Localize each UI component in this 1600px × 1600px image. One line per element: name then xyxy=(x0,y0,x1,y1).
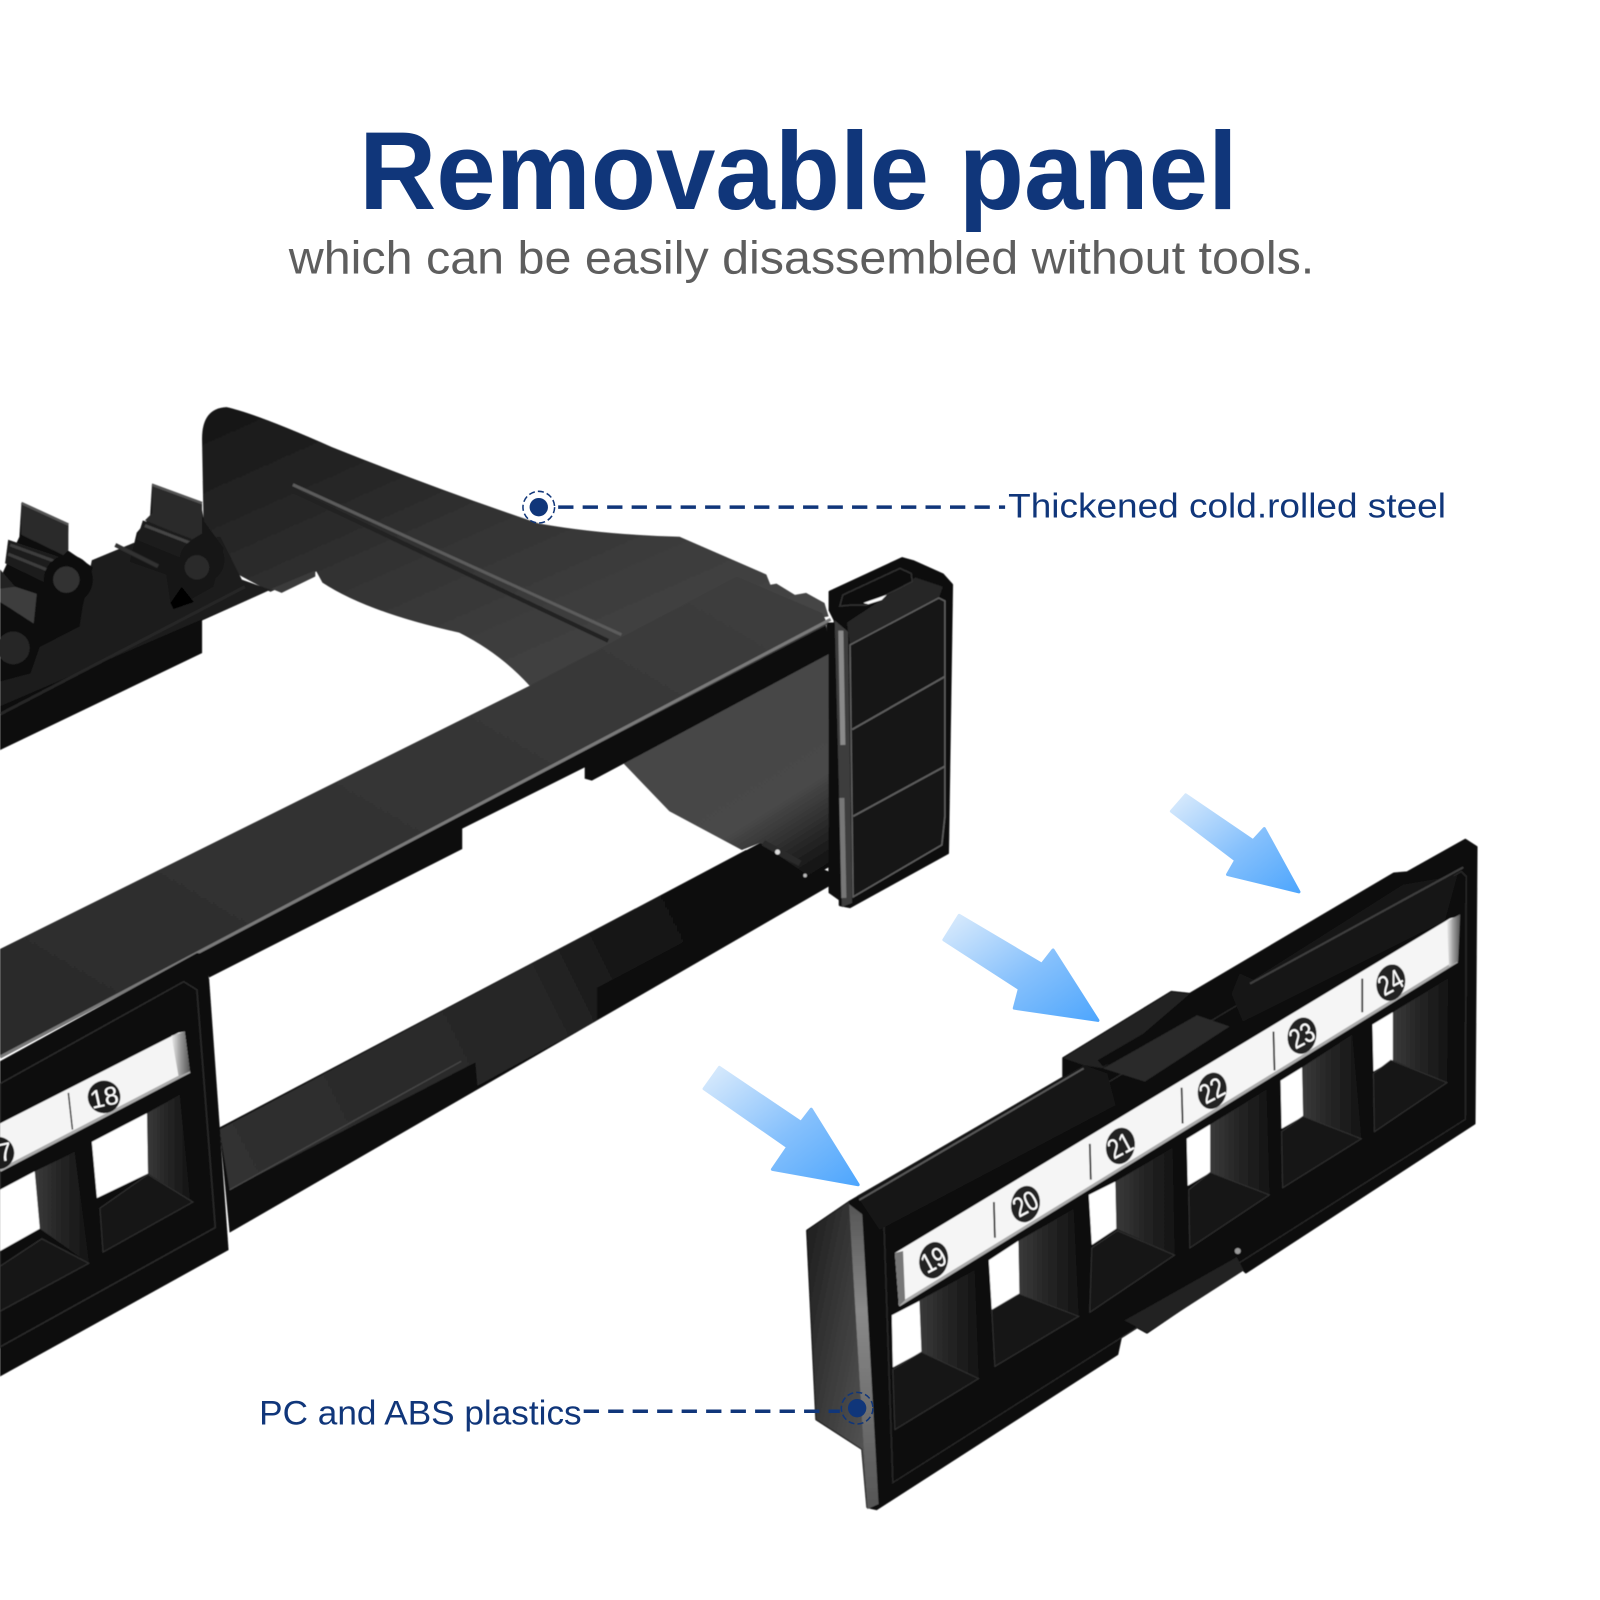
front plate ports 17 and 18 xyxy=(0,953,229,1377)
cap slot xyxy=(840,568,912,606)
patch panel frame xyxy=(0,407,952,1377)
subtitle: which can be easily disassembled without tools. xyxy=(288,231,1314,283)
number 20: 20 xyxy=(1007,1184,1043,1223)
port 21 xyxy=(1089,1148,1174,1312)
module body xyxy=(807,840,1477,1509)
port 18 xyxy=(147,1095,190,1200)
cap top face xyxy=(847,578,943,645)
arrow: bottom left xyxy=(704,1067,858,1185)
arrow: top right xyxy=(1171,795,1299,892)
arrow: middle xyxy=(944,915,1098,1020)
top rail surface xyxy=(0,577,828,1057)
third clamp xyxy=(0,569,40,682)
cap face xyxy=(850,598,945,897)
callout: thickened steel xyxy=(523,487,1446,525)
left clamp xyxy=(0,503,93,663)
column behind end cap xyxy=(827,622,843,903)
number 19: 19 xyxy=(915,1240,952,1279)
number 18: 18 xyxy=(88,1081,121,1115)
lower rail xyxy=(219,843,834,1233)
port 23 xyxy=(1281,1035,1361,1188)
number 24: 24 xyxy=(1373,963,1409,1002)
port 22 xyxy=(1187,1090,1269,1248)
port 19 xyxy=(892,1270,979,1430)
callout text: plastics: PC and ABS plastics xyxy=(259,1394,582,1432)
title: Removable panel xyxy=(359,110,1238,233)
cap edge strip xyxy=(835,620,852,907)
rear bracket with cable clamps xyxy=(0,484,315,750)
label strip xyxy=(0,1032,190,1170)
module bezel edge xyxy=(849,1204,879,1509)
removable module xyxy=(807,840,1477,1509)
inner gusset xyxy=(620,647,829,878)
end cap xyxy=(830,558,952,907)
top rail highlight xyxy=(0,619,831,1057)
side plate groove xyxy=(293,485,621,641)
side plate xyxy=(202,407,829,686)
right clamp xyxy=(115,484,224,609)
bracket clip tab xyxy=(271,570,315,593)
gusset latch xyxy=(763,843,807,877)
module label strip xyxy=(895,914,1460,1306)
callout: plastics xyxy=(259,1392,873,1432)
top rail front face xyxy=(197,622,831,978)
port 24 xyxy=(1372,979,1448,1132)
module side face xyxy=(807,1202,867,1507)
top ridges and clip xyxy=(857,867,1463,1333)
port 20 xyxy=(989,1209,1079,1366)
number 23: 23 xyxy=(1284,1016,1320,1055)
module inner frame xyxy=(884,871,1466,1483)
callout text: steel: Thickened cold.rolled steel xyxy=(1008,487,1446,525)
port 17 xyxy=(35,1152,89,1263)
number 21: 21 xyxy=(1102,1126,1138,1165)
number 22: 22 xyxy=(1194,1071,1230,1110)
